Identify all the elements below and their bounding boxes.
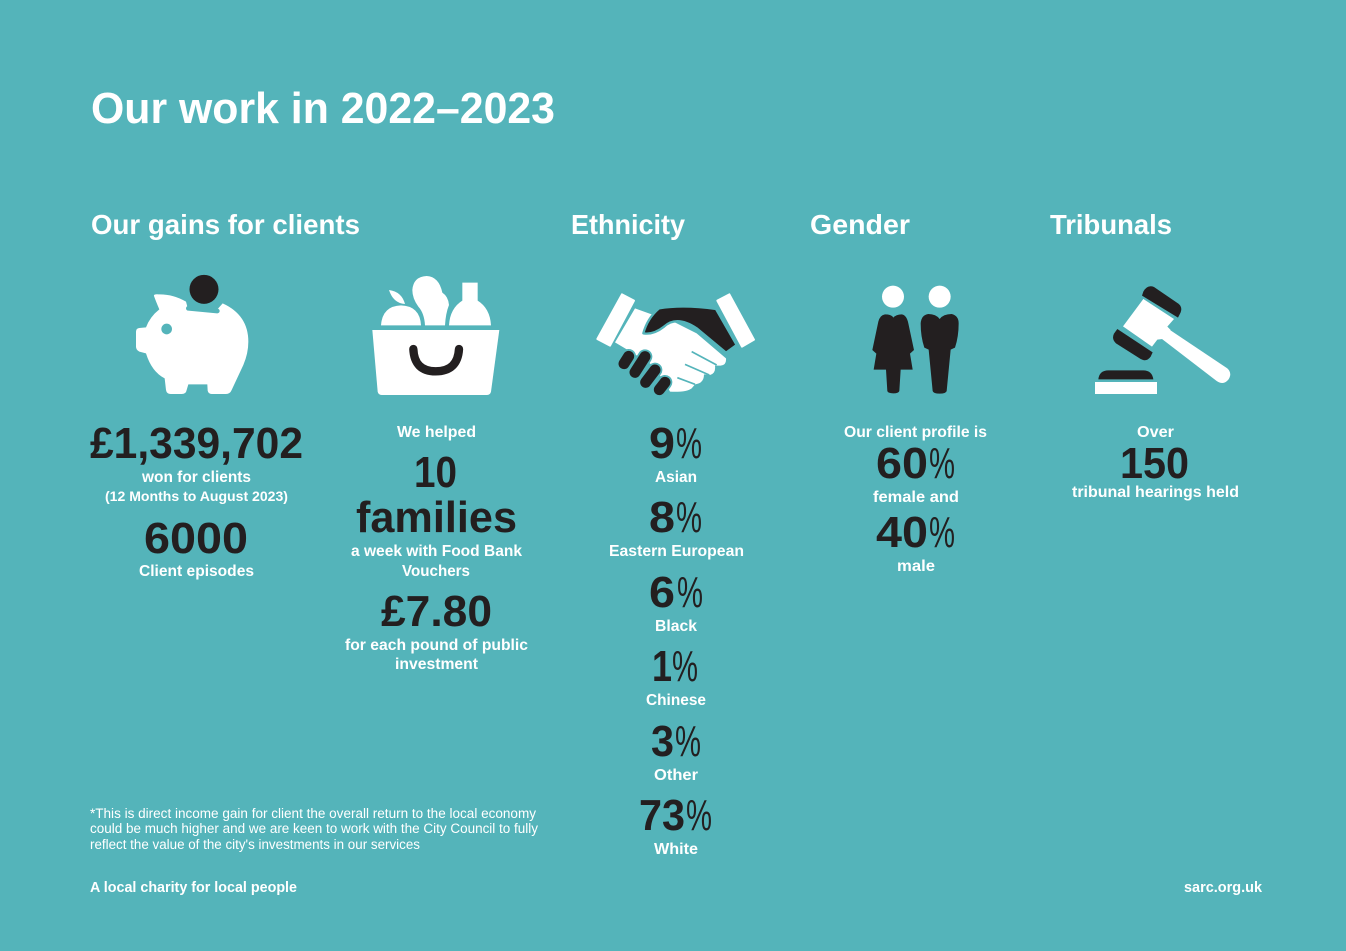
stat: other: Other [654, 767, 698, 784]
stat: families: families [356, 493, 517, 542]
icon: handshake [597, 294, 754, 392]
label: public investment line 1: for each pound of public [345, 637, 528, 654]
stat: eastern european: Eastern European [609, 543, 744, 560]
label: over: Over [1137, 424, 1174, 441]
stat: female: female and [873, 489, 959, 506]
stat: eastern european: 8 [649, 493, 675, 542]
stat: female: 60 [876, 439, 928, 488]
footnote: *This is direct income gain for client the overall return to the local economy [90, 806, 536, 821]
stat: male [876, 508, 955, 575]
stat: asian: 9 [649, 419, 675, 468]
stat: asian: % [676, 419, 702, 468]
stat: amount won: £1,339,702 [90, 419, 303, 468]
website: sarc.org.uk [1184, 880, 1263, 896]
label: food bank vouchers line 1: a week with Food Bank [351, 543, 522, 560]
stat: white: % [686, 791, 712, 840]
stat: asian [649, 419, 702, 486]
stat: male: 40 [876, 508, 928, 557]
label: tribunal hearings held: tribunal hearings held [1072, 484, 1239, 501]
stat: eastern european: % [676, 493, 702, 542]
column: gender [844, 424, 987, 575]
footnote: reflect the value of the city's investments in our services [90, 837, 420, 852]
stat: eastern european [609, 493, 744, 560]
heading: our gains for clients: Our gains for clients [91, 209, 360, 240]
label: client profile: Our client profile is [844, 424, 987, 441]
stat: female [873, 439, 959, 506]
stat: black: Black [655, 618, 697, 635]
tagline: A local charity for local people [90, 880, 297, 896]
label: client episodes: Client episodes [139, 563, 254, 580]
stat: chinese: 1 [652, 642, 672, 691]
column: ethnicity [609, 419, 744, 858]
stat: white: White [654, 841, 698, 858]
stat: chinese: % [672, 642, 698, 691]
stat: other: % [675, 717, 701, 766]
stat: black: 6 [649, 568, 675, 617]
stat: male: % [929, 508, 955, 557]
label: period: (12 Months to August 2023) [105, 488, 288, 504]
icon: female and male figures [872, 286, 959, 394]
stat: chinese: Chinese [646, 692, 706, 709]
label: food bank vouchers line 2: Vouchers [402, 563, 470, 580]
heading: gender: Gender [810, 209, 910, 240]
stat: 10: 10 [414, 448, 457, 497]
icon: piggy bank [136, 275, 248, 394]
stat: female: % [929, 439, 955, 488]
stat: tribunal hearings: 150 [1120, 439, 1189, 488]
title: Our work in 2022–2023 [91, 84, 555, 133]
stat: white: 73 [639, 791, 685, 840]
label: won for clients: won for clients [141, 469, 251, 486]
footnote: could be much higher and we are keen to work with the City Council to fully [90, 821, 538, 836]
stat: client episodes: 6000 [144, 514, 248, 563]
icon: food basket [372, 276, 499, 395]
column: gains for clients [90, 419, 303, 580]
heading: ethnicity: Ethnicity [571, 209, 685, 240]
stat: other [651, 717, 701, 784]
label: public investment line 2: investment [395, 656, 479, 673]
stat: male: male [897, 558, 935, 575]
stat: black: % [677, 568, 703, 617]
stat: chinese [646, 642, 706, 709]
footnote [90, 806, 538, 852]
icon: gavel [1095, 286, 1230, 394]
column: tribunals [1072, 424, 1239, 501]
column: food bank and investment [345, 424, 528, 673]
label: we helped: We helped [397, 424, 476, 441]
stat: asian: Asian [655, 469, 697, 486]
stat: return per pound: £7.80 [381, 587, 492, 636]
heading: tribunals: Tribunals [1050, 209, 1172, 240]
stat: black [649, 568, 703, 635]
stat: other: 3 [651, 717, 674, 766]
stat: white [639, 791, 712, 858]
